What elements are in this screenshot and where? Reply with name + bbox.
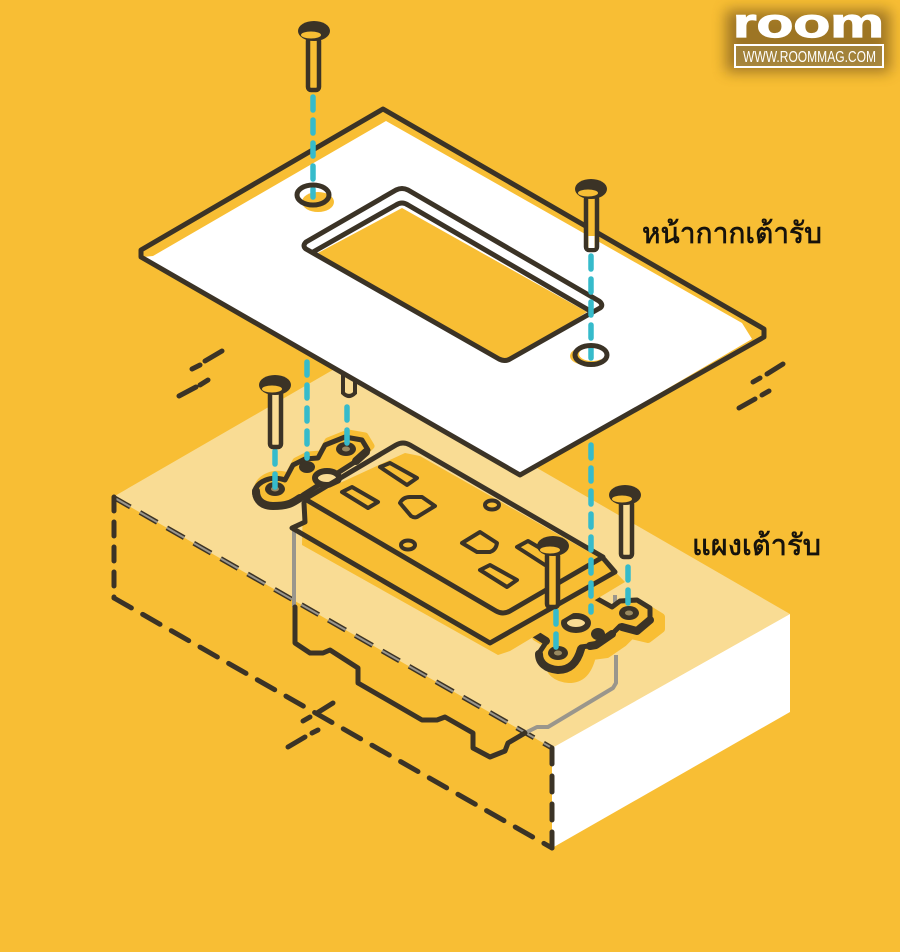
wall block dashed edges bbox=[113, 497, 552, 848]
outlet face outline bbox=[305, 443, 603, 613]
hole right shadow bbox=[570, 347, 602, 365]
box outline outside wall bbox=[295, 607, 525, 757]
cyan guide top left bbox=[310, 97, 316, 197]
strap heavy lower edges bbox=[527, 620, 650, 670]
ground D 2 bbox=[462, 532, 497, 552]
bottom mounting strap bbox=[525, 593, 661, 679]
screw top left bbox=[298, 21, 330, 90]
logo url box bbox=[735, 45, 883, 67]
cover plate bbox=[141, 97, 764, 475]
plate white fill bbox=[143, 121, 752, 475]
outlet back box bbox=[294, 530, 616, 757]
label: cover plate: หน้ากากเต้ารับ bbox=[642, 218, 822, 250]
hole left cutout bbox=[299, 185, 329, 194]
logo bbox=[726, 0, 890, 72]
logo wordmark: room bbox=[733, 0, 884, 46]
small hole 1 bbox=[485, 500, 499, 510]
outlet body bbox=[292, 443, 625, 655]
label: outlet: แผงเต้ารับ bbox=[692, 530, 821, 562]
hole right top cover bbox=[579, 347, 605, 361]
wall block bbox=[113, 360, 790, 848]
window outer outline bbox=[304, 188, 602, 360]
top mounting strap bbox=[255, 433, 371, 506]
slot 4 bbox=[517, 541, 557, 565]
plate outline bbox=[141, 109, 764, 475]
plate break mark left bbox=[179, 351, 222, 396]
strap shadow bbox=[258, 433, 371, 501]
outlet lower outline bbox=[292, 503, 615, 643]
wall break mark bbox=[288, 703, 333, 747]
screw left bbox=[259, 375, 291, 447]
box outline inside wall bbox=[294, 530, 616, 734]
strap shadow bbox=[536, 602, 661, 679]
strap outline bbox=[525, 593, 650, 670]
hole left shadow bbox=[302, 192, 334, 212]
strap heavy right edge bbox=[356, 452, 366, 461]
small hole 2 bbox=[401, 540, 415, 550]
wall block top face bbox=[113, 360, 790, 748]
stub screw under plate bbox=[343, 372, 355, 396]
plate break mark right bbox=[739, 364, 783, 408]
hole left ring bbox=[297, 185, 329, 205]
logo shadow bbox=[726, 10, 890, 72]
slot 3 bbox=[480, 565, 517, 587]
slot 2 bbox=[342, 487, 378, 508]
screw front bbox=[537, 536, 569, 607]
hole right ring bbox=[575, 346, 607, 364]
ground D 1 bbox=[400, 497, 435, 517]
slot 1 bbox=[380, 463, 417, 485]
wall block right face bbox=[552, 614, 790, 848]
outlet yellow fill bbox=[302, 453, 625, 655]
screw right bbox=[609, 485, 641, 557]
window inner line bbox=[313, 203, 592, 312]
strap heavy lower edge bbox=[256, 491, 300, 506]
cyan guide top right bbox=[588, 256, 594, 358]
window fill bbox=[316, 208, 587, 361]
strap outline bbox=[255, 437, 368, 505]
cyan guide lines, lower bbox=[275, 362, 628, 650]
screw top right bbox=[575, 179, 607, 250]
